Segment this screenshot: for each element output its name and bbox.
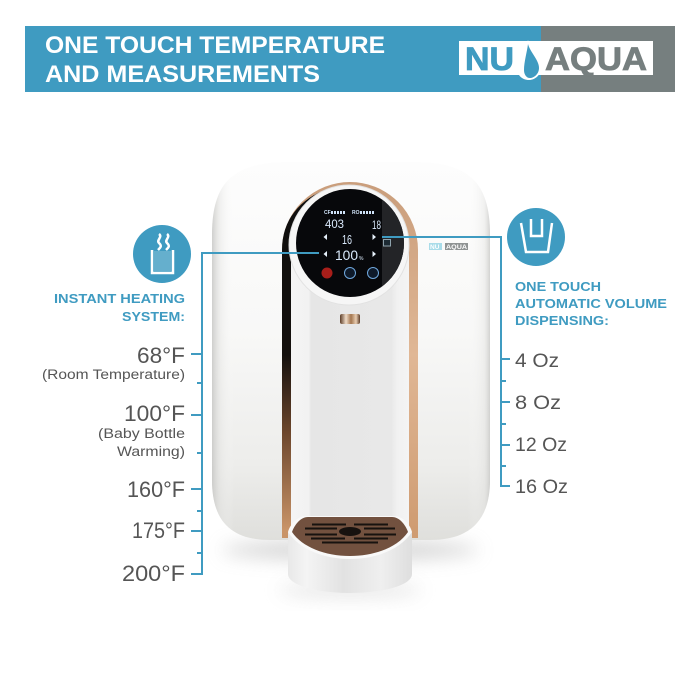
digital readouts: 403 (325, 217, 344, 231)
floor shadow (222, 540, 478, 560)
filter status: RO (352, 210, 360, 216)
volume labels: 12 Oz (515, 435, 567, 456)
heading: instant heating (54, 291, 185, 324)
small body logo (429, 243, 468, 251)
heading: volume dispensing: ONE TOUCH (515, 279, 601, 294)
filter status (324, 210, 360, 216)
drip tray cup (288, 532, 412, 593)
temperature labels: 200°F (122, 561, 185, 586)
volume labels (515, 351, 568, 498)
drip tray grate (292, 517, 408, 556)
heading: volume dispensing: AUTOMATIC VOLUME (515, 296, 667, 311)
temperature labels: (Baby Bottle (98, 426, 185, 441)
small display tag (384, 240, 390, 246)
header banner (25, 26, 675, 92)
NU AQUA logo (459, 40, 653, 80)
temperature labels: 68°F (137, 343, 185, 368)
temperature labels: 175°F (132, 518, 185, 543)
small body logo: AQUA (446, 244, 467, 251)
infographic canvas (25, 26, 675, 602)
inner recess panel (291, 192, 409, 530)
heading (45, 32, 385, 88)
icon: cup (507, 208, 565, 266)
left temperature scale (191, 253, 319, 574)
digital readouts: 18 (372, 218, 381, 232)
small body logo: NU (430, 244, 440, 251)
copper arch trim (286, 186, 414, 538)
heading: instant heating: SYSTEM: (122, 309, 185, 324)
spout (340, 303, 360, 315)
right volume scale (382, 237, 510, 486)
digital readouts: 16 (342, 232, 352, 247)
NU AQUA logo: NU (465, 41, 514, 77)
temperature labels (42, 343, 185, 586)
icon: heating cup (133, 225, 191, 283)
dispenser product (212, 162, 490, 597)
heading: ONE TOUCH TEMPERATURE (45, 32, 385, 59)
temperature labels: (Room Temperature) (42, 367, 185, 382)
volume labels: 8 Oz (515, 393, 561, 414)
dispenser body (212, 162, 490, 540)
display screen (296, 185, 407, 300)
temperature labels: 160°F (127, 477, 185, 502)
NU AQUA logo: AQUA (545, 41, 647, 77)
temperature labels: Warming) (117, 444, 185, 459)
arrows (324, 234, 376, 257)
volume labels: 4 Oz (515, 351, 559, 372)
heading: instant heating: INSTANT HEATING (54, 291, 185, 306)
heading: volume dispensing: DISPENSING: (515, 313, 609, 328)
digital readouts (325, 217, 381, 263)
digital readouts: % (359, 256, 364, 262)
volume labels: 16 Oz (515, 477, 568, 498)
heading: volume dispensing (515, 279, 667, 328)
digital readouts: 100 (335, 247, 358, 263)
heading: AND MEASUREMENTS (45, 61, 320, 88)
touch buttons (322, 268, 332, 278)
temperature labels: 100°F (124, 401, 185, 426)
filter status: CF (324, 210, 331, 216)
dial housing (289, 185, 409, 305)
black left arch band (286, 193, 330, 538)
